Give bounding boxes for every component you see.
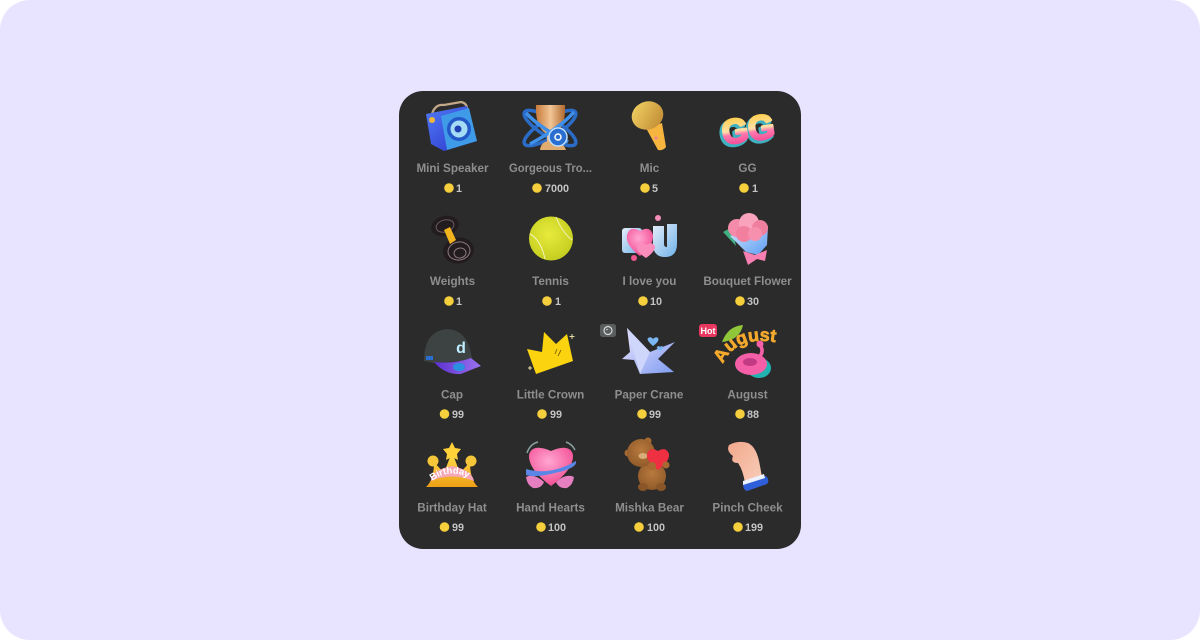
gift: Cap: d — [456, 340, 466, 357]
gift: Little Crown: Little Crown — [517, 388, 584, 402]
gift: Mic — [628, 97, 667, 195]
gift: Mini Speaker: 1 — [456, 183, 462, 195]
gift: Birthday Hat — [417, 442, 487, 534]
gift: Birthday Hat: 99 — [452, 522, 464, 534]
gift: Hand Hearts: Hand Hearts — [516, 502, 585, 514]
gift: Little Crown — [517, 332, 584, 421]
gift: GG: GG — [719, 107, 777, 152]
gift: Mishka Bear — [615, 438, 684, 534]
gift: Cap: Cap — [441, 388, 463, 402]
gift: I love you: 10 — [650, 296, 662, 308]
gift: Bouquet Flower: 30 — [747, 296, 759, 308]
gift: Pinch Cheek: Pinch Cheek — [712, 502, 783, 514]
gift: Gorgeous Trophy: 7000 — [545, 183, 569, 195]
gift: Hand Hearts — [516, 442, 585, 534]
gift: Mic: Mic — [640, 162, 660, 175]
gift: GG: GG — [738, 162, 757, 175]
gift: Mini Speaker — [416, 102, 489, 195]
gift: Paper Crane: Paper Crane — [615, 388, 684, 402]
gift: Bouquet Flower — [703, 213, 792, 308]
gift: Weights: 1 — [456, 296, 462, 308]
gift: Birthday Hat: Birthday — [429, 466, 470, 480]
badge: Hot: Hot — [700, 326, 716, 336]
badge: palette — [600, 324, 616, 337]
gift: Tennis: 1 — [555, 296, 561, 308]
gift: Gorgeous Trophy: Gorgeous Tro... — [509, 162, 592, 175]
gift: GG: 1 — [752, 183, 758, 195]
panel: gift grid — [399, 91, 801, 549]
gift: Cap: 99 — [452, 409, 464, 421]
gift: Mishka Bear: Mishka Bear — [615, 502, 684, 514]
gift: Bouquet Flower: Bouquet Flower — [703, 275, 792, 288]
gift: I love you: I love you — [623, 275, 676, 288]
gift: Paper Crane — [600, 324, 684, 421]
gift: August: August — [714, 330, 777, 364]
gift: August: August — [727, 388, 768, 402]
gift: Hand Hearts: 100 — [548, 522, 566, 534]
gift: Gorgeous Trophy — [509, 104, 592, 195]
gift: Tennis — [529, 216, 573, 308]
gift: Tennis: Tennis — [532, 275, 569, 288]
gift: Weights: Weights — [430, 275, 476, 288]
gift: Mic: 5 — [652, 183, 658, 195]
gift: Pinch Cheek — [712, 442, 783, 534]
gift: Little Crown: 99 — [550, 409, 562, 421]
gift: Pinch Cheek: 199 — [745, 522, 763, 534]
gift: Birthday Hat: Birthday Hat — [417, 502, 487, 514]
gift: Weights — [429, 213, 476, 308]
gift: Cap — [424, 329, 481, 421]
gift: GG: GG — [718, 110, 775, 155]
gift: Paper Crane: 99 — [649, 409, 661, 421]
gift: August: 88 — [747, 409, 759, 421]
gift: August — [699, 324, 777, 421]
gift: GG — [718, 107, 777, 195]
gift: Mini Speaker: Mini Speaker — [416, 162, 489, 175]
gift: I love you — [622, 215, 677, 308]
gift: Mishka Bear: 100 — [647, 522, 665, 534]
